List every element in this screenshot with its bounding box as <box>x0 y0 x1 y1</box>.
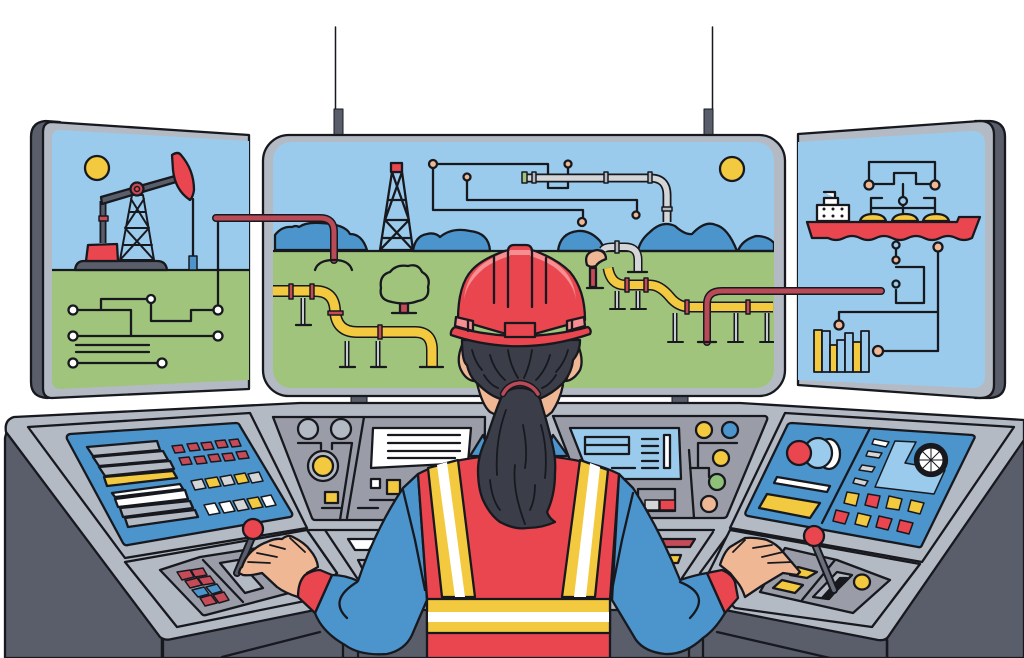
circuit diagram <box>68 218 222 368</box>
center right panel <box>553 416 767 518</box>
circuit lines <box>429 160 640 226</box>
right control panel <box>760 548 890 613</box>
background hills <box>275 223 774 251</box>
icon: valve wheel <box>915 444 947 476</box>
paper readout <box>371 428 471 468</box>
hands and cuffs <box>239 536 800 613</box>
icon: oil derrick <box>380 163 413 250</box>
bar chart <box>814 330 869 372</box>
circuit diagram <box>834 162 942 356</box>
right sleeve <box>612 474 725 654</box>
left button grid <box>172 439 276 515</box>
cross-screen red pipes <box>216 218 881 342</box>
icon: sun <box>720 157 744 181</box>
right joystick <box>804 526 834 590</box>
left blue display <box>67 423 292 545</box>
neck and collar <box>477 383 563 416</box>
left yellow pipeline <box>273 284 443 367</box>
hard hat <box>451 245 591 346</box>
icon: round dial stack <box>787 438 840 469</box>
icon: sun <box>85 156 109 180</box>
right control plate <box>705 413 1014 627</box>
icon: pump jack <box>75 153 197 270</box>
control console <box>5 403 1024 658</box>
console body <box>5 430 1024 658</box>
left monitor <box>31 121 250 398</box>
left keypad panel <box>160 548 293 615</box>
left joystick <box>237 519 263 573</box>
right blue display <box>745 423 975 547</box>
ceiling mounts <box>334 27 713 404</box>
icon: tree <box>381 265 429 313</box>
upper grey pipeline <box>522 172 672 222</box>
left sleeve <box>315 474 427 654</box>
right monitor <box>796 121 1005 398</box>
hair and ears <box>459 340 582 399</box>
center strip controls <box>307 530 730 578</box>
center left panel <box>273 417 485 520</box>
safety vest <box>418 457 619 658</box>
left control plate <box>28 413 337 627</box>
center monitor <box>263 135 785 396</box>
right pipelines <box>586 241 775 342</box>
icon: tanker ship <box>807 192 980 240</box>
operator <box>239 245 800 658</box>
ponytail <box>478 383 555 528</box>
right button grid <box>833 492 924 534</box>
